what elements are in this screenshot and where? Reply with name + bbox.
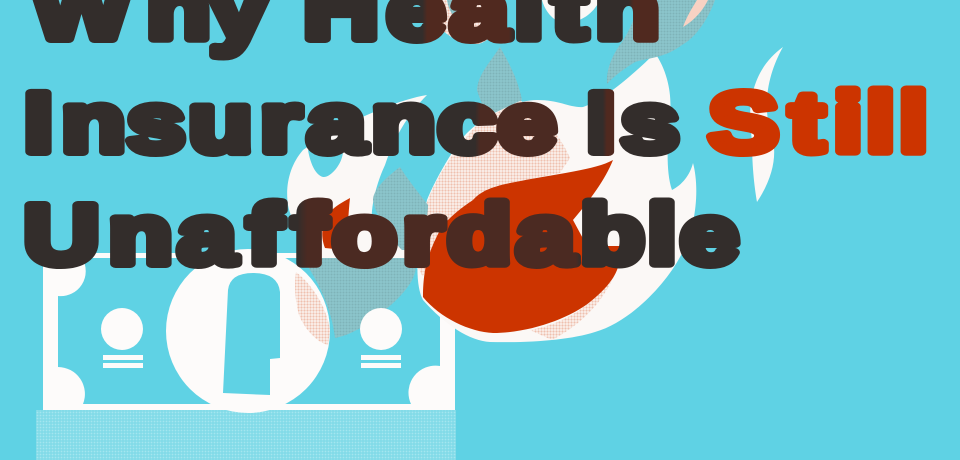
- flame: top pink and white tongues: [425, 0, 501, 44]
- title line 2: [24, 76, 928, 170]
- title line 1: [32, 0, 660, 57]
- flame: pink halftone body: [415, 100, 570, 277]
- flame: gray halftone tongues: [477, 47, 522, 115]
- lower halftone band: [36, 410, 456, 460]
- flame: thin white crescent: [750, 47, 783, 202]
- flame: pink fringe under red: [530, 280, 612, 340]
- flame: white outer body: [417, 53, 696, 342]
- bill seal: right: [360, 308, 402, 368]
- title line 2: Still: [708, 76, 928, 170]
- flame: red main: [423, 160, 620, 333]
- flame: cyan gap in left tongue: [308, 150, 343, 177]
- icon: dollar bill: [43, 249, 455, 413]
- title: [24, 0, 928, 282]
- flame: white left tongue: [287, 95, 427, 258]
- icon: flames: [287, 0, 783, 345]
- flame: gray shadow over bill: [302, 258, 416, 338]
- flame: pink shadow on bill medallion: [295, 272, 330, 345]
- title line 3: Unaffordable: [24, 188, 739, 282]
- flame: small red tongue: [322, 198, 350, 250]
- title line 2: Insurance: [24, 76, 556, 170]
- title line 2: Is: [586, 76, 679, 170]
